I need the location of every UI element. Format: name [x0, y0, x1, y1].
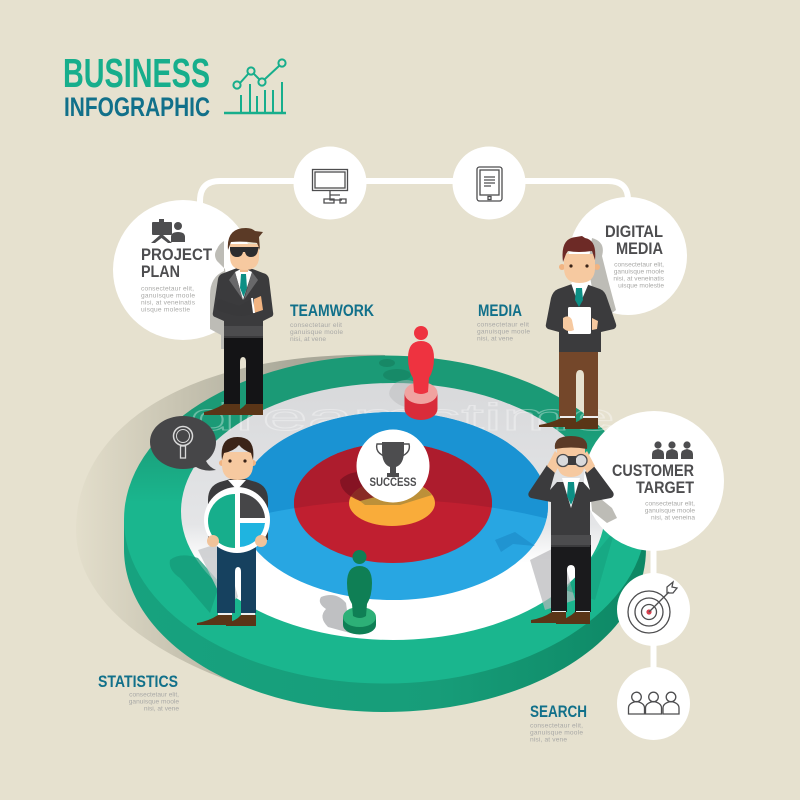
media label: MEDIA	[478, 301, 522, 320]
legs	[217, 545, 256, 613]
title: INFOGRAPHIC	[64, 92, 210, 122]
connector line	[200, 181, 628, 205]
jacket	[213, 268, 273, 338]
teamwork label: ganuisque moole	[290, 329, 343, 336]
character: digital media	[539, 236, 616, 429]
panel: project plan: PROJECT	[141, 245, 213, 264]
platform shadow	[76, 355, 390, 711]
blue ring	[238, 412, 548, 600]
character: statistics	[197, 437, 270, 626]
panel: customer target: nisi, at veneina	[651, 514, 695, 522]
shirt and tie	[235, 269, 252, 300]
tablet	[568, 307, 591, 334]
red pawn	[404, 326, 438, 420]
watermark: dreamstime	[190, 397, 615, 439]
panel: digital media: uisque molestie	[618, 282, 664, 290]
panel: digital media: consectetaur elit,	[614, 262, 664, 268]
media label: ganuisque moole	[477, 328, 530, 336]
statistics label: ganuisque moole	[129, 698, 179, 706]
media label: consectetaur elit	[477, 322, 529, 328]
success badge	[356, 430, 430, 502]
search label	[530, 702, 587, 744]
panel: digital media: ganuisque moole	[614, 268, 664, 276]
icon circle: people	[617, 667, 690, 740]
panel: project plan: PLAN	[141, 262, 180, 281]
statistics label: nisi, at vene	[144, 706, 179, 712]
character: customer target	[528, 436, 617, 624]
speech bubble: magnifier	[150, 416, 216, 471]
title: BUSINESS	[63, 50, 210, 96]
jacket	[208, 478, 268, 540]
legs	[559, 352, 598, 417]
statistics label: STATISTICS	[98, 672, 178, 691]
hands and face	[547, 451, 595, 473]
panel: digital media: DIGITAL	[605, 222, 663, 241]
character: project plan	[204, 228, 273, 415]
teamwork label	[290, 301, 375, 343]
icon: presenter	[151, 219, 185, 243]
teamwork label: consectetaur elit	[290, 322, 342, 329]
hands	[207, 535, 219, 547]
shoes	[197, 615, 256, 626]
title	[63, 50, 210, 122]
icon: three people	[652, 441, 693, 459]
green pawn	[343, 550, 376, 634]
statistics label	[98, 672, 179, 712]
head	[240, 262, 248, 272]
teamwork label: nisi, at vene	[290, 336, 326, 343]
platform side	[124, 520, 646, 712]
search label: SEARCH	[530, 702, 587, 721]
legs	[224, 338, 263, 405]
head	[232, 470, 241, 479]
icon circle: tablet	[452, 146, 526, 220]
green ring	[124, 356, 646, 684]
shoes	[204, 404, 263, 415]
white ring	[181, 383, 605, 640]
panel: project plan: nisi, at veneinatis	[141, 300, 196, 306]
icon circle: target	[617, 573, 690, 646]
head	[575, 272, 584, 282]
icon circle: monitor	[294, 146, 366, 220]
vertical connectors	[650, 548, 656, 670]
panel: digital media: nisi, at veneinatis	[613, 276, 665, 282]
shoes	[531, 612, 590, 624]
pie chart prop	[204, 487, 270, 553]
icon: growth chart	[224, 59, 286, 113]
icon: trophy	[377, 442, 409, 477]
binoculars	[557, 454, 569, 466]
jacket	[528, 465, 614, 547]
teamwork label: TEAMWORK	[290, 301, 375, 320]
red ring	[294, 443, 492, 563]
sunglasses	[230, 247, 259, 257]
legs	[551, 545, 591, 612]
panel: project plan	[113, 200, 253, 340]
panel: customer target	[584, 411, 724, 551]
search label: nisi, at vene	[530, 736, 567, 744]
panel: digital media: MEDIA	[616, 239, 663, 258]
panel: customer target: ganuisque moole	[645, 508, 695, 514]
shirt and tie	[562, 478, 580, 508]
panel: project plan: ganuisque moole	[141, 292, 195, 300]
panel: digital media	[569, 197, 687, 315]
panel: customer target: TARGET	[636, 478, 695, 497]
shirt and tie	[571, 281, 589, 306]
search label: consectetaur elit,	[530, 722, 583, 730]
panel: project plan: consectetaur elit,	[141, 286, 194, 292]
media label: nisi, at vene	[477, 336, 513, 342]
success badge: SUCCESS	[370, 475, 416, 489]
figure shadows on platform	[170, 359, 615, 633]
search label: ganuisque moole	[530, 730, 583, 736]
target platform	[124, 356, 646, 712]
shoes	[539, 418, 598, 429]
panel: customer target: CUSTOMER	[612, 461, 694, 480]
panel: project plan: uisque molestie	[141, 306, 190, 314]
panel: customer target: consectetaur elit,	[645, 500, 695, 508]
statistics label: consectetaur elit,	[129, 692, 179, 698]
media label	[477, 301, 530, 342]
jacket	[546, 284, 616, 352]
arms	[216, 298, 255, 316]
orange centre	[349, 480, 435, 526]
